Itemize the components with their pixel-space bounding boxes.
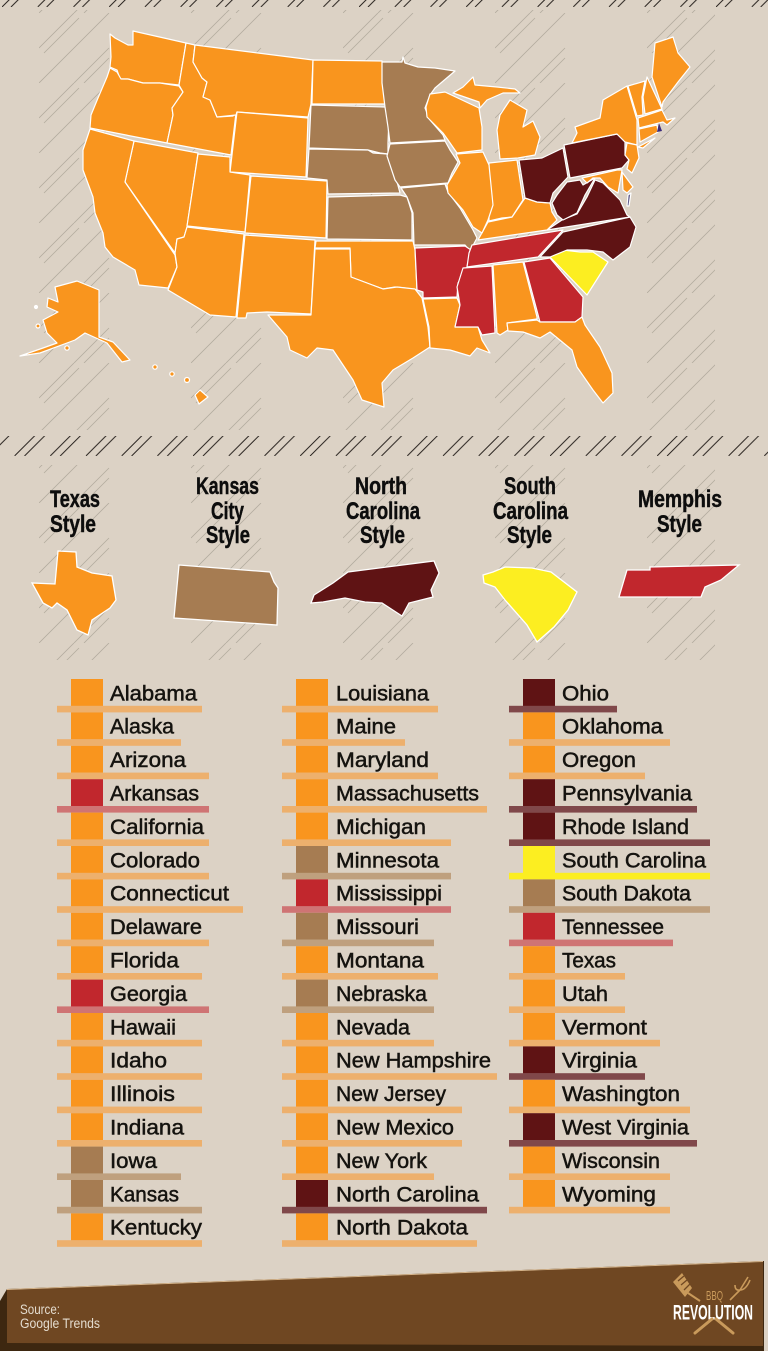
row: Nevada: Nevada <box>336 1016 410 1039</box>
legend: South Carolina style: South <box>504 473 556 500</box>
row: Oregon <box>509 746 645 779</box>
state: South Dakota <box>309 105 389 154</box>
row: Minnesota: Minnesota <box>336 849 439 872</box>
row: New Hampshire: New Hampshire <box>336 1050 491 1073</box>
row: South Carolina <box>509 846 710 879</box>
row: Nebraska <box>282 980 434 1013</box>
row: Michigan: Michigan <box>336 816 426 839</box>
state: West Virginia <box>552 178 595 220</box>
state: Wyoming <box>230 112 308 177</box>
row: South Carolina: South Carolina <box>562 849 706 872</box>
row: Kentucky: Kentucky <box>110 1217 203 1240</box>
icon: spatula <box>673 1273 700 1301</box>
legend: South Carolina style <box>483 473 577 642</box>
row: Oregon: Oregon <box>562 749 636 772</box>
US map by preferred BBQ style <box>20 31 690 407</box>
row: Connecticut <box>57 879 243 913</box>
row: Connecticut: Connecticut <box>110 883 229 906</box>
state: Florida <box>507 317 613 403</box>
state: Long Island <box>638 138 655 148</box>
row: Vermont: Vermont <box>562 1016 647 1039</box>
row: Iowa: Iowa <box>110 1150 157 1173</box>
state list: column 2 <box>282 679 497 1247</box>
row: Arkansas <box>57 779 209 813</box>
row: Montana <box>282 946 438 980</box>
state: Rhode Island <box>657 123 662 132</box>
row: Hawaii <box>57 1013 202 1046</box>
row: Virginia <box>509 1046 645 1080</box>
row: Arizona: Arizona <box>110 749 186 772</box>
row: Arkansas: Arkansas <box>110 783 199 806</box>
legend: Kansas City style: Kansas <box>196 473 259 500</box>
row: Maryland: Maryland <box>336 749 429 772</box>
state: North Carolina <box>540 217 636 260</box>
row: Kentucky <box>57 1213 203 1247</box>
legend: Kansas City style: Style <box>206 522 250 549</box>
row: Missouri <box>282 913 434 946</box>
state: Oklahoma <box>315 241 417 290</box>
state: Louisiana <box>423 298 490 356</box>
row: Oklahoma <box>509 712 670 746</box>
row: Indiana <box>57 1113 202 1147</box>
row: Nevada <box>282 1013 434 1046</box>
state: Massachusetts <box>638 110 675 128</box>
row: Idaho: Idaho <box>110 1050 167 1073</box>
row: Virginia: Virginia <box>562 1050 637 1073</box>
row: Texas: Texas <box>562 950 616 973</box>
row: Rhode Island: Rhode Island <box>562 816 689 839</box>
row: Utah <box>509 980 625 1013</box>
state: Minnesota <box>382 57 455 143</box>
legend: Texas style: Texas <box>50 486 100 513</box>
row: New Mexico: New Mexico <box>336 1116 454 1139</box>
legend: Memphis style: Style <box>657 511 702 538</box>
row: Massachusetts: Massachusetts <box>336 783 479 806</box>
row: Illinois: Illinois <box>110 1083 175 1106</box>
state: Connecticut <box>639 125 658 142</box>
state: Arkansas <box>415 246 471 298</box>
state: California <box>83 129 177 288</box>
icon: crossed handles <box>695 1319 733 1333</box>
row: Hawaii: Hawaii <box>110 1016 176 1039</box>
row: Georgia <box>57 980 209 1013</box>
state: Wisconsin <box>426 92 482 153</box>
legend: South Carolina style: Carolina <box>493 498 569 525</box>
source text: Source: <box>20 1302 60 1317</box>
state: Oregon <box>90 68 183 143</box>
row: Missouri: Missouri <box>336 916 419 939</box>
state: Vermont <box>628 81 645 116</box>
footer banner <box>0 1261 764 1351</box>
row: West Virginia <box>509 1113 697 1147</box>
state: Maine <box>652 37 690 107</box>
style legend panel <box>32 473 739 642</box>
legend: Memphis style <box>619 486 739 597</box>
state: Indiana <box>489 160 523 221</box>
row: Michigan <box>282 813 451 846</box>
row: Wyoming <box>509 1180 670 1213</box>
state: Michigan <box>453 77 540 159</box>
legend: Texas style <box>32 486 116 635</box>
row: Delaware: Delaware <box>110 916 202 939</box>
state: Maryland <box>582 170 633 193</box>
state: Utah <box>187 154 250 232</box>
row: Nebraska: Nebraska <box>336 983 427 1006</box>
state: Ohio <box>519 148 568 203</box>
row: California: California <box>110 816 204 839</box>
state list: column 1 <box>57 679 243 1247</box>
row: South Dakota <box>509 879 710 913</box>
row: Oklahoma: Oklahoma <box>562 716 663 739</box>
state: Nevada <box>125 141 198 253</box>
state: New Hampshire <box>643 77 662 114</box>
row: Indiana: Indiana <box>110 1116 184 1139</box>
row: Ohio <box>509 679 617 712</box>
row: New Hampshire <box>282 1046 497 1080</box>
row: Minnesota <box>282 846 451 879</box>
row: Alaska <box>57 712 181 746</box>
row: Pennsylvania: Pennsylvania <box>562 783 692 806</box>
legend: Memphis style: Memphis <box>638 486 722 513</box>
state: Hawaii <box>153 365 208 404</box>
row: Washington <box>509 1080 690 1113</box>
row: South Dakota: South Dakota <box>562 883 691 906</box>
row: Maine: Maine <box>336 716 396 739</box>
state: New Jersey <box>625 143 639 173</box>
state: Kansas <box>327 195 412 240</box>
row: California <box>57 813 209 846</box>
legend: North Carolina style: Style <box>360 522 405 549</box>
row: New Mexico <box>282 1113 462 1147</box>
row: Delaware <box>57 913 209 946</box>
row: Colorado: Colorado <box>110 849 200 872</box>
state: Georgia <box>524 258 583 322</box>
row: New York: New York <box>336 1150 428 1173</box>
row: New York <box>282 1147 434 1180</box>
legend: North Carolina style: North <box>355 473 407 500</box>
row: North Dakota <box>282 1213 477 1247</box>
state: Idaho <box>167 43 236 155</box>
row: Louisiana <box>282 679 438 712</box>
state: Texas <box>268 249 430 407</box>
legend: South Carolina style: Style <box>507 522 552 549</box>
legend: North Carolina style <box>311 473 439 616</box>
state: South Carolina <box>550 250 608 295</box>
row: Pennsylvania <box>509 779 697 813</box>
row: Washington: Washington <box>562 1083 680 1106</box>
logo: BBQ Revolution <box>673 1273 753 1333</box>
state: Alaska <box>20 281 130 362</box>
state: Montana <box>193 45 313 117</box>
row: North Carolina: North Carolina <box>336 1183 479 1206</box>
row: Massachusetts <box>282 779 487 813</box>
state: Washington <box>110 31 186 85</box>
row: Texas <box>509 946 625 980</box>
row: New Jersey <box>282 1080 462 1113</box>
row: Illinois <box>57 1080 202 1113</box>
row: Arizona <box>57 746 209 779</box>
row: Tennessee: Tennessee <box>562 916 664 939</box>
row: Iowa <box>57 1147 181 1180</box>
row: Florida: Florida <box>110 950 179 973</box>
row: Idaho <box>57 1046 202 1080</box>
row: Mississippi <box>282 879 451 913</box>
source text: Google Trends <box>20 1316 100 1331</box>
row: Mississippi: Mississippi <box>336 883 442 906</box>
icon: fork <box>730 1277 750 1300</box>
row: Alaska: Alaska <box>110 716 174 739</box>
row: Alabama <box>57 679 202 712</box>
row: Louisiana: Louisiana <box>336 682 429 705</box>
row: Colorado <box>57 846 209 879</box>
legend: North Carolina style: Carolina <box>346 498 420 525</box>
state: Iowa <box>387 141 458 187</box>
state: Virginia <box>547 180 630 230</box>
legend: Kansas City style: City <box>211 498 244 525</box>
row: Montana: Montana <box>336 950 424 973</box>
legend: Texas style: Style <box>50 511 96 538</box>
state: Nebraska <box>307 149 400 194</box>
row: Tennessee <box>509 913 673 946</box>
state list: column 3 <box>509 679 710 1213</box>
state: Arizona <box>168 227 244 317</box>
logo small word: BBQ <box>706 1288 723 1303</box>
row: North Carolina <box>282 1180 487 1213</box>
row: Kansas <box>57 1180 202 1213</box>
row: Maryland <box>282 746 438 779</box>
state: Illinois <box>447 152 493 233</box>
row: Georgia: Georgia <box>110 983 187 1006</box>
row: New Jersey: New Jersey <box>336 1083 446 1106</box>
row: North Dakota: North Dakota <box>336 1217 468 1240</box>
row: Alabama: Alabama <box>110 682 197 705</box>
state: Missouri <box>401 184 477 251</box>
row: Maine <box>282 712 405 746</box>
state: New Mexico <box>237 235 315 318</box>
source text <box>20 1302 100 1331</box>
legend: Kansas City style <box>174 473 278 625</box>
state: Kentucky <box>478 198 557 240</box>
state: Alabama <box>493 262 537 335</box>
row: Wisconsin: Wisconsin <box>562 1150 660 1173</box>
row: Wyoming: Wyoming <box>562 1183 656 1206</box>
row: Ohio: Ohio <box>562 682 609 705</box>
state: Mississippi <box>455 266 495 335</box>
state: Tennessee <box>467 230 563 267</box>
state: New York <box>572 86 637 145</box>
row: Utah: Utah <box>562 983 608 1006</box>
row: West Virginia: West Virginia <box>562 1116 689 1139</box>
state: Pennsylvania <box>564 134 629 178</box>
state: Colorado <box>245 176 327 238</box>
row: Florida <box>57 946 202 980</box>
row: Rhode Island <box>509 813 710 846</box>
row: Wisconsin <box>509 1147 670 1180</box>
state: Virginia eastern shore <box>627 193 631 206</box>
row: Kansas: Kansas <box>110 1183 179 1206</box>
row: Vermont <box>509 1013 660 1046</box>
state: North Dakota <box>312 60 387 104</box>
